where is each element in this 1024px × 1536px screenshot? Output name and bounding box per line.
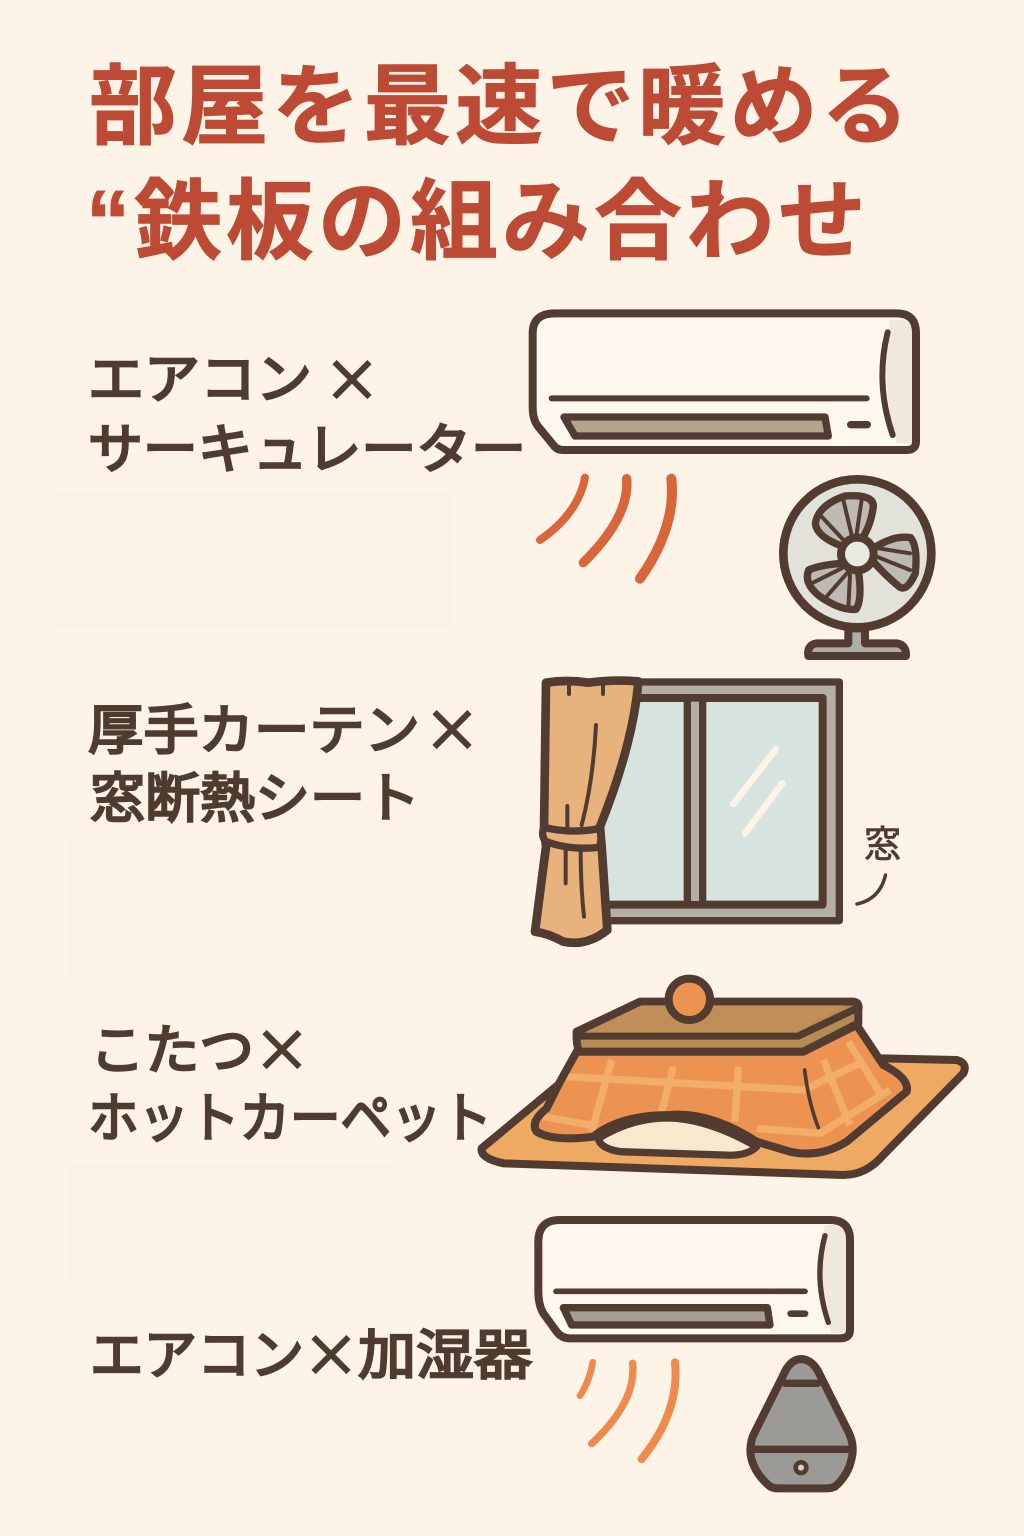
title: “鉄板の組み合わせ bbox=[86, 172, 866, 271]
panel: curtain and window sheet text bbox=[67, 687, 498, 977]
panel: kotatsu and hot carpet text bbox=[68, 1007, 492, 1280]
title: 部屋を最速で暖める bbox=[89, 57, 909, 156]
panel: air conditioner and circulator text: × bbox=[324, 337, 380, 418]
panel: kotatsu and hot carpet text: × bbox=[254, 1007, 310, 1088]
panel: air conditioner and circulator text bbox=[55, 337, 526, 628]
panel: air conditioner and circulator text: エアコン bbox=[88, 350, 312, 410]
title bbox=[86, 57, 909, 271]
panel: curtain and window sheet text: 厚手カーテン bbox=[88, 701, 420, 761]
panel: curtain and window sheet text: 窓断熱シート bbox=[90, 769, 420, 829]
icon: kotatsu on carpet bbox=[482, 979, 965, 1175]
icon: warm air waves 2 bbox=[580, 1362, 676, 1459]
panel: air conditioner and humidifier text: 加湿器 bbox=[358, 1326, 532, 1386]
panel: kotatsu and hot carpet text: こたつ bbox=[90, 1021, 254, 1081]
icon: warm air waves 1 bbox=[540, 478, 672, 579]
annotation: window label bbox=[857, 824, 901, 904]
icon: humidifier bbox=[750, 1359, 853, 1488]
icon: window with curtain bbox=[535, 681, 839, 943]
panel: kotatsu and hot carpet text: ホットカーペット bbox=[88, 1089, 492, 1149]
panel: air conditioner and humidifier text: × bbox=[303, 1312, 359, 1393]
panel: air conditioner and humidifier text bbox=[78, 1312, 540, 1450]
icon: air conditioner 1 bbox=[533, 313, 916, 450]
icon: air conditioner 2 bbox=[538, 1220, 850, 1338]
panel: air conditioner and circulator text: サーキュレーター bbox=[88, 420, 526, 480]
panel: curtain and window sheet text: × bbox=[424, 687, 480, 768]
panel: air conditioner and humidifier text: エアコン bbox=[90, 1326, 304, 1386]
icon: circulator fan bbox=[783, 479, 931, 656]
annotation: window label: 窓 bbox=[864, 824, 901, 865]
